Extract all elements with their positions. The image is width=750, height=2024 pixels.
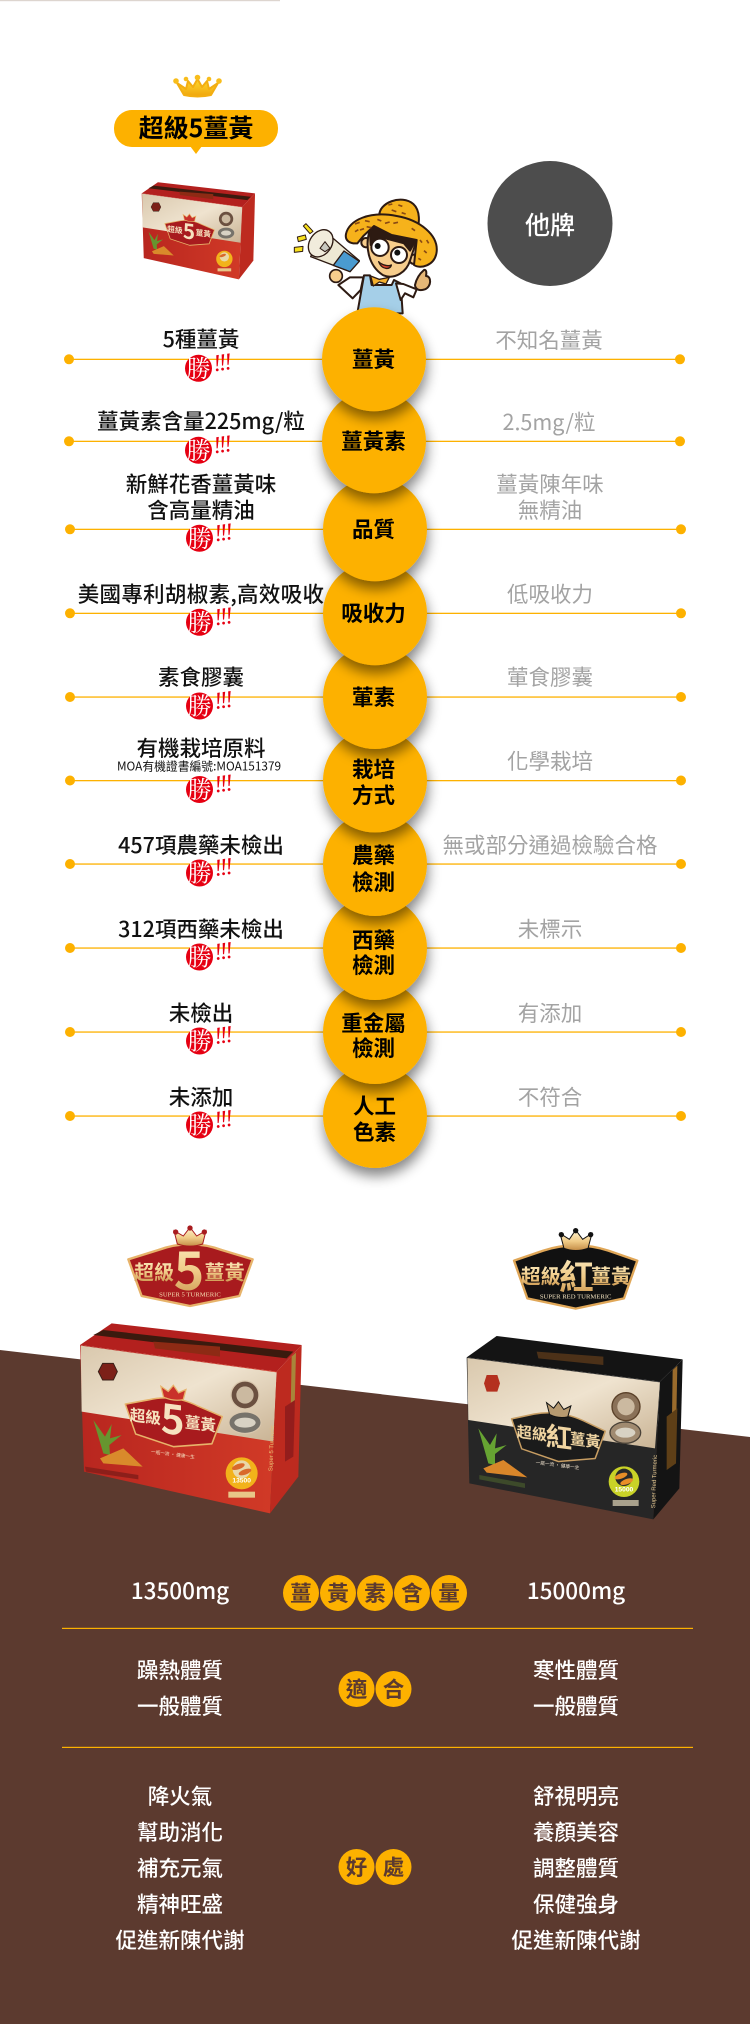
row 2: 薑黃素: 薑黃素含量225mg/粒 (97, 405, 305, 436)
row 10: 人工色素: 未添加 (169, 1081, 233, 1112)
cert badges (610, 1393, 641, 1443)
win stamp: 勝 (188, 519, 212, 554)
win stamp (186, 603, 234, 638)
product box small: 超級5薑黃: 超級 (167, 224, 183, 237)
logo: 超級5薑黃: 5 (174, 1230, 204, 1305)
heading circles: 好處: 處 (383, 1851, 404, 1882)
product box: 超級5薑黃: 一瓶一流 · 健康一生 (151, 1448, 195, 1461)
logo: 超級紅薑黃: 紅 (559, 1249, 594, 1299)
row 7: 農藥檢測: 457項農藥未檢出 (118, 829, 284, 860)
center badge: 方式 (352, 779, 395, 810)
logo: 超級紅薑黃: 超級 (521, 1260, 561, 1289)
right list: 寒性體質 (533, 1654, 619, 1685)
product box: 超級紅薑黃: 一瓶一流 · 健康一生 (535, 1459, 580, 1471)
product box small: 超級5薑黃: 5 (183, 214, 195, 246)
hat (346, 200, 437, 267)
right list: 一般體質 (533, 1690, 619, 1721)
icon: brand emblem (484, 1375, 500, 1392)
product box: 超級紅薑黃: Super Red Turmeric (651, 1455, 659, 1508)
center badge (323, 812, 427, 916)
box logo: 5 (161, 1386, 185, 1448)
box logo: 薑黃 (570, 1427, 600, 1453)
right list (511, 1780, 641, 1955)
win stamp: !!! (212, 854, 234, 882)
center badge: 西藥 (352, 924, 395, 955)
win stamp (186, 854, 234, 888)
row 3: 品質: 含高量精油 (147, 494, 255, 525)
left list: 促進新陳代謝 (115, 1924, 245, 1955)
top edge strip (0, 0, 280, 1)
center badge (323, 645, 427, 749)
row 9: 重金屬檢測: 有添加 (518, 997, 582, 1028)
win stamp: !!! (211, 349, 233, 377)
left list (115, 1780, 245, 1955)
row 6: 栽培方式: 有機栽培原料 (136, 732, 266, 763)
heading circles: 適合: 合 (383, 1673, 405, 1704)
row 1: 薑黃: 不知名薑黃 (495, 324, 603, 355)
row 6: 栽培方式: 化學栽培 (507, 745, 593, 776)
row 4: 吸收力 (65, 561, 686, 665)
row 3: 品質: 無精油 (518, 494, 582, 525)
farmer mascot with megaphone (294, 200, 437, 313)
win stamp (185, 431, 233, 466)
center badge: 薑黃 (352, 343, 395, 374)
center badge: 葷素 (352, 681, 395, 712)
right list: 促進新陳代謝 (511, 1924, 641, 1955)
product box: 超級5薑黃: Super 5 Turmeric (269, 1425, 276, 1471)
center badge: 吸收力 (341, 597, 406, 628)
left list: 幫助消化 (137, 1816, 223, 1847)
win stamp: !!! (212, 687, 234, 715)
value: 15000mg: 15000mg (527, 1574, 625, 1606)
right list (533, 1654, 619, 1721)
row: curcumin content (131, 1574, 625, 1611)
heading circles: 適合 (338, 1671, 412, 1707)
win stamp: !!! (212, 938, 234, 966)
row 10: 人工色素: 不符合 (518, 1081, 582, 1112)
center badge: 人工 (353, 1090, 396, 1121)
center badge (323, 980, 427, 1084)
heading circles: 好處: 好 (346, 1851, 367, 1882)
logo: 超級5薑黃: SUPER 5 TURMERIC (159, 1292, 221, 1299)
left list: 精神旺盛 (137, 1888, 223, 1919)
center badge: 重金屬 (341, 1007, 406, 1038)
overalls and shirt (338, 275, 417, 313)
center badge: 色素 (353, 1116, 396, 1147)
row 2: 薑黃素: 2.5mg/粒 (503, 406, 595, 437)
win stamp: 勝 (188, 770, 212, 805)
box logo: 超級 (517, 1420, 547, 1446)
icon: crown (173, 75, 222, 96)
win stamp: !!! (212, 1106, 234, 1134)
left list: 一般體質 (137, 1690, 223, 1721)
center badge (323, 477, 427, 581)
gold seal (226, 1457, 258, 1498)
row 4: 吸收力: 美國專利胡椒素,高效吸收 (78, 578, 324, 609)
left list: 補充元氣 (137, 1852, 223, 1883)
icon: megaphone (303, 225, 359, 282)
win stamp: 勝 (188, 1106, 212, 1140)
win stamp: 勝 (186, 349, 210, 384)
heading circles: 好處 (338, 1849, 412, 1885)
win stamp: 勝 (188, 854, 212, 888)
center badge: 農藥 (352, 839, 395, 870)
product box small: 超級5薑黃: 薑黃 (196, 227, 211, 240)
row 10: 人工色素 (65, 1064, 686, 1168)
row 3: 品質 (65, 468, 686, 581)
icon: yellow sound dashes (294, 224, 313, 252)
win stamp (186, 770, 234, 805)
win stamp: 勝 (188, 1022, 212, 1056)
row 7: 農藥檢測: 無或部分通過檢驗合格 (442, 829, 658, 860)
left list (137, 1654, 223, 1721)
row 6: 栽培方式: MOA有機證書編號:MOA151379 (117, 758, 281, 774)
center badge: 檢測 (352, 1032, 395, 1063)
center badge (322, 389, 426, 493)
glasses and eyes (371, 239, 407, 268)
row 6: 栽培方式 (65, 728, 686, 832)
heading circles: 薑黃素含量 (283, 1575, 467, 1611)
win stamp: 勝 (188, 938, 212, 972)
center badge: 薑黃素 (341, 425, 406, 456)
box logo: 紅 (546, 1414, 572, 1457)
win stamp: 勝 (186, 431, 210, 466)
win stamp (186, 686, 234, 722)
divider (62, 1628, 693, 1629)
center badge: 檢測 (352, 949, 395, 980)
row 5: 葷素: 葷食膠囊 (507, 661, 593, 692)
win stamp: 勝 (188, 686, 212, 722)
gold seal: 15000 (615, 1487, 634, 1494)
row 1: 薑黃: 5種薑黃 (163, 323, 239, 354)
win stamp (186, 519, 234, 554)
brand pill: 超級5薑黃: 超級5薑黃 (139, 109, 253, 145)
right list: 調整體質 (533, 1852, 619, 1883)
heading circles: 適合: 適 (346, 1673, 368, 1704)
right list: 養顏美容 (533, 1816, 619, 1847)
logo: 超級5薑黃 (128, 1225, 253, 1306)
win stamp (186, 938, 234, 972)
center badge (322, 307, 426, 411)
gold seal (609, 1466, 639, 1506)
heading circles: 薑黃素含量: 黃 (327, 1577, 349, 1608)
heading circles: 薑黃素含量: 素 (364, 1577, 386, 1608)
box logo: 薑黃 (185, 1409, 216, 1436)
cert badges (229, 1381, 261, 1433)
heading circles: 薑黃素含量: 薑 (290, 1577, 312, 1608)
brown background panel (0, 1350, 750, 2024)
heading circles: 薑黃素含量: 含 (401, 1577, 423, 1608)
row: benefits (115, 1780, 641, 1955)
logo: 超級紅薑黃 (514, 1228, 637, 1309)
left list: 躁熱體質 (137, 1654, 223, 1685)
box logo (512, 1396, 605, 1468)
win stamp: !!! (212, 1022, 234, 1050)
center badge: 品質 (352, 513, 395, 544)
box logo (125, 1379, 222, 1453)
brand pill: 超級5薑黃 (114, 109, 278, 154)
gold seal: 13500 (232, 1478, 251, 1485)
win stamp: !!! (212, 519, 234, 547)
other brand circle: 他牌 (488, 161, 612, 286)
divider (62, 1747, 693, 1748)
row 8: 西藥檢測: 312項西藥未檢出 (118, 913, 284, 944)
row 7: 農藥檢測 (65, 812, 686, 916)
win stamp: !!! (212, 603, 234, 631)
icon: brand emblem (98, 1363, 117, 1380)
center badge (323, 561, 427, 665)
win stamp: !!! (212, 770, 234, 799)
row 9: 重金屬檢測: 未檢出 (169, 997, 233, 1028)
win stamp: !!! (211, 431, 233, 459)
row 1: 薑黃 (64, 307, 685, 411)
logo: 超級5薑黃: 超級 (134, 1256, 174, 1285)
row: suitable constitution (137, 1654, 619, 1721)
win stamp (186, 1022, 234, 1056)
logo: 超級紅薑黃: 薑黃 (591, 1260, 631, 1289)
product box: 超級紅薑黃 (467, 1336, 683, 1519)
value: 13500mg: 13500mg (131, 1574, 229, 1606)
row 3: 品質: 新鮮花香薑黃味 (126, 468, 276, 499)
row 5: 葷素: 素食膠囊 (158, 661, 244, 692)
row 9: 重金屬檢測 (65, 980, 686, 1084)
row 4: 吸收力: 低吸收力 (507, 578, 593, 609)
row 3: 品質: 薑黃陳年味 (496, 468, 604, 499)
row 2: 薑黃素 (64, 389, 685, 493)
win stamp: 勝 (188, 603, 212, 638)
face and hair (361, 225, 419, 277)
center badge (323, 896, 427, 1000)
right list: 舒視明亮 (533, 1780, 619, 1811)
win stamp (185, 349, 233, 384)
row 5: 葷素 (65, 645, 686, 749)
row 8: 西藥檢測: 未標示 (518, 913, 582, 944)
logo: 超級紅薑黃: SUPER RED TURMERIC (540, 1293, 612, 1300)
other brand circle: 他牌: 他牌 (525, 206, 575, 242)
product box: 超級5薑黃 (80, 1323, 302, 1513)
box logo: 超級 (130, 1402, 161, 1429)
right list: 保健強身 (533, 1888, 619, 1919)
plant and turmeric (478, 1428, 527, 1477)
win stamp (186, 1106, 234, 1140)
heading circles: 薑黃素含量: 量 (438, 1577, 460, 1608)
center badge: 栽培 (352, 753, 395, 784)
left list: 降火氣 (148, 1780, 212, 1811)
thumbs-up hand (415, 270, 430, 290)
row 8: 西藥檢測 (65, 896, 686, 1000)
product box small: 超級5薑黃 (142, 182, 255, 279)
logo: 超級5薑黃: 薑黃 (205, 1256, 245, 1285)
center badge (323, 728, 427, 832)
center badge: 檢測 (352, 866, 395, 897)
plant and turmeric (93, 1420, 143, 1467)
center badge (323, 1064, 427, 1168)
